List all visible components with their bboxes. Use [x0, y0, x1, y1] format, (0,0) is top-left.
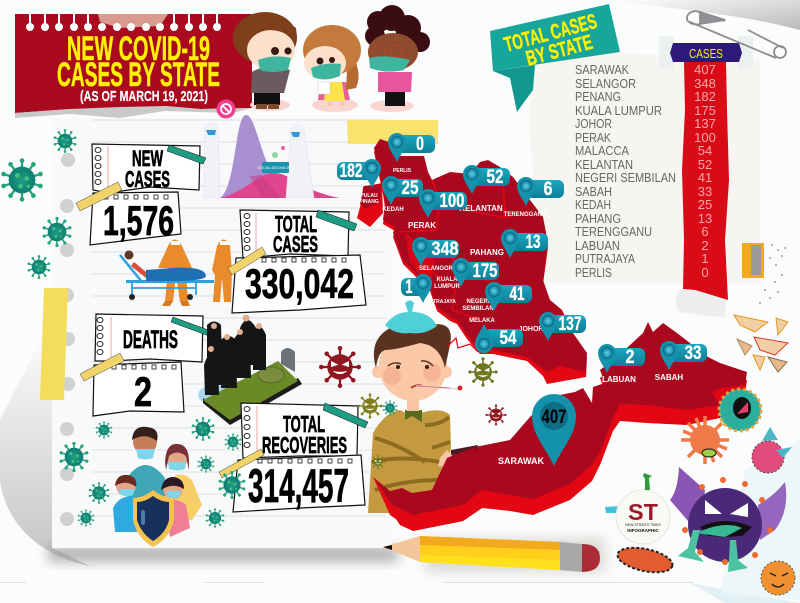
tape pieces [659, 36, 753, 69]
heading [262, 411, 347, 458]
state names: PAHANG [575, 211, 621, 226]
pin: Selangor 348: 348 [432, 239, 458, 260]
ice bag [385, 300, 437, 333]
paper curl [676, 289, 726, 317]
map: Borneo (Sarawak and Sabah): LABUAN [602, 375, 636, 384]
pin: Melaka 54: 54 [500, 328, 517, 349]
map: Borneo (Sarawak and Sabah): SABAH [655, 373, 683, 382]
note: total recoveries value: 314,457 [248, 459, 349, 512]
case values: 6 [701, 224, 709, 239]
red strip [682, 62, 729, 300]
blanket [368, 410, 451, 513]
yellow tape top [347, 120, 438, 144]
state names [575, 62, 676, 280]
note: total cases value: 330,042 [245, 260, 354, 307]
case values: 2 [701, 238, 709, 253]
banner: total cases by state: BY STATE [524, 31, 595, 71]
pin: Penang 182 [337, 159, 381, 188]
pin: Penang 182: 182 [340, 161, 362, 182]
logo: ST infographic [605, 473, 670, 544]
heading: TOTAL [275, 211, 317, 237]
icon: no symbol [216, 100, 236, 118]
caterpillar monster [615, 543, 675, 577]
state labels: PERAK [408, 221, 436, 230]
pin: Negeri Sembilan 41: 41 [510, 284, 525, 305]
table paper [529, 52, 760, 285]
pin: Negeri Sembilan 41 [485, 282, 532, 311]
pin: Sabah 33: 33 [684, 343, 702, 364]
pin: Terengganu 6: 6 [544, 179, 552, 200]
green monster [719, 389, 761, 431]
pin: Kuala Lumpur 175: 175 [472, 261, 498, 282]
title text: NEW COVID-19 [67, 30, 210, 68]
pink monster [752, 427, 792, 473]
state labels: KEDAH [382, 207, 404, 213]
location pins [337, 133, 707, 466]
state names: NEGERI SEMBILAN [575, 170, 676, 185]
girl with glasses [365, 5, 430, 112]
title text [57, 30, 220, 105]
pin: Terengganu 6 [517, 177, 564, 206]
ribbon header: CASES [689, 47, 723, 61]
case values: 182 [694, 89, 716, 104]
state labels: TERENGGANU [504, 212, 546, 218]
case values: 54 [698, 143, 712, 158]
medic 2 [212, 240, 232, 302]
state names: PERLIS [575, 265, 612, 280]
hand and mug [438, 450, 452, 467]
case values: 348 [694, 76, 716, 91]
boy with mask [233, 12, 297, 111]
monster viruses [615, 389, 795, 595]
title banner [15, 14, 252, 118]
heading: RECOVERIES [262, 432, 347, 458]
orange corner monster [761, 561, 795, 595]
state names: SABAH [575, 184, 612, 199]
banner: total cases by state [490, 4, 620, 112]
note: total cases [240, 210, 357, 258]
note: total recoveries value [218, 449, 365, 512]
medic 1 [158, 240, 192, 306]
state names: SELANGOR [575, 76, 636, 91]
state names: PENANG [575, 89, 621, 104]
pin: Sabah 33 [660, 341, 707, 370]
small red and olive viruses [319, 338, 506, 469]
pin: Johor 137: 137 [558, 314, 582, 335]
case values: 25 [698, 197, 712, 212]
title text: CASES BY STATE [57, 56, 220, 94]
pin: Selangor 348 [412, 237, 459, 266]
state labels: LUMPUR [434, 284, 460, 290]
state names: KEDAH [575, 197, 611, 212]
orange monster [681, 416, 729, 464]
sick man with thermometer [368, 300, 482, 531]
pin: Kelantan 52 [463, 165, 510, 194]
case values: 41 [698, 170, 712, 185]
map overlap [373, 447, 482, 515]
state labels: PULAU [360, 193, 378, 199]
state names: JOHOR [575, 116, 612, 131]
safety pin [687, 11, 786, 58]
case values: 175 [694, 103, 716, 118]
purple bat monster [670, 467, 786, 572]
pin: Johor 137 [539, 312, 586, 341]
state labels: PUTRAJAYA [426, 299, 456, 305]
pin: Labuan 2 [598, 344, 645, 373]
pin: Pahang 13: 13 [526, 232, 540, 253]
pin: Putrajaya 1: 1 [406, 277, 413, 298]
stretcher with medics [120, 240, 232, 306]
note: new cases value [76, 182, 181, 245]
note: new cases [92, 144, 206, 193]
note: total recoveries [241, 403, 368, 458]
yellow tape left [40, 288, 68, 400]
state names: KELANTAN [575, 157, 633, 172]
heading [125, 146, 170, 192]
pin: Sarawak 407 [532, 394, 576, 466]
thermometer [416, 386, 458, 389]
case values: 100 [694, 130, 716, 145]
note: deaths value [80, 353, 184, 416]
map: Borneo (Sarawak and Sabah): SARAWAK [498, 456, 544, 466]
state labels: PAHANG [470, 248, 504, 257]
state names: LABUAN [575, 238, 620, 253]
heading: CASES [125, 166, 170, 192]
logo: ST infographic: INFOGRAPHIC [627, 528, 660, 533]
state labels: SEMBILAN [462, 306, 494, 312]
state labels [359, 168, 546, 333]
pin: Sarawak 407: 407 [542, 407, 566, 428]
state labels: PINANG [359, 199, 379, 205]
case values: 0 [701, 265, 709, 280]
logo: ST infographic: ST [628, 499, 658, 525]
pin: Perak 100 [419, 189, 467, 218]
funeral illustration [198, 314, 302, 425]
bell curve chart with health workers: SOCIAL DISTANCING [258, 166, 293, 170]
state labels: JOHOR [519, 326, 543, 333]
heading: TOTAL [283, 411, 325, 437]
case values: 33 [698, 184, 712, 199]
note: total cases value [228, 247, 366, 313]
state labels: PERLIS [393, 168, 412, 174]
case values: 407 [694, 62, 716, 77]
case values: 52 [698, 157, 712, 172]
pencil [383, 536, 605, 572]
pin: Kedah 25: 25 [402, 178, 419, 199]
state labels: KELANTAN [459, 204, 503, 213]
pencil shavings [734, 244, 788, 372]
state names: MALACCA [575, 143, 629, 158]
pin: Melaka 54 [475, 324, 523, 353]
family with shield [113, 427, 202, 547]
map: peninsular Malaysia [357, 139, 587, 384]
state names: PERAK [575, 130, 611, 145]
pin: Perak 100: 100 [440, 191, 464, 212]
pin: Perlis 0 [388, 133, 435, 162]
map: Borneo (Sarawak and Sabah) [373, 322, 747, 531]
kids illustration [233, 5, 430, 112]
state names: SARAWAK [575, 62, 629, 77]
head [379, 331, 447, 401]
pin: Labuan 2: 2 [626, 347, 634, 368]
heading: NEW [132, 146, 163, 171]
girl with mask [303, 25, 361, 112]
case values: 1 [701, 251, 709, 266]
ribbon header [670, 43, 742, 62]
pin: Kedah 25 [382, 176, 423, 205]
pin: Putrajaya 1 [401, 274, 432, 303]
note: deaths [95, 314, 211, 362]
map: Penang [357, 183, 383, 227]
note: deaths value: 2 [134, 368, 152, 415]
pin: Kelantan 52: 52 [486, 167, 504, 188]
notebook paper [52, 118, 392, 548]
state names: KUALA LUMPUR [575, 103, 662, 118]
state labels: MELAKA [469, 318, 495, 324]
title text: (AS OF MARCH 19, 2021) [80, 88, 208, 105]
pin: Kuala Lumpur 175 [452, 258, 499, 287]
case values [694, 62, 716, 280]
case values: 13 [698, 211, 712, 226]
note: deaths: DEATHS [123, 326, 178, 354]
heading [273, 211, 318, 257]
icon: shield [133, 490, 174, 547]
note: new cases value: 1,576 [103, 197, 174, 244]
state labels: KUALA [436, 277, 458, 283]
state names: PUTRAJAYA [575, 251, 635, 266]
pin: Pahang 13 [501, 229, 548, 258]
table: cases by state [575, 36, 753, 317]
logo: ST infographic: NEW STRAITS TIMES [625, 523, 661, 527]
stretcher bed [120, 250, 214, 300]
heading: CASES [273, 231, 318, 257]
pencil sharpener [742, 243, 764, 278]
state labels: NEGERI [466, 299, 490, 305]
state labels: SELANGOR [419, 266, 454, 272]
bell curve chart with health workers [204, 100, 340, 198]
state names: TERENGGANU [575, 224, 652, 239]
virus decorations [1, 129, 242, 528]
pin: Perlis 0: 0 [416, 134, 424, 155]
case values: 137 [694, 116, 716, 131]
